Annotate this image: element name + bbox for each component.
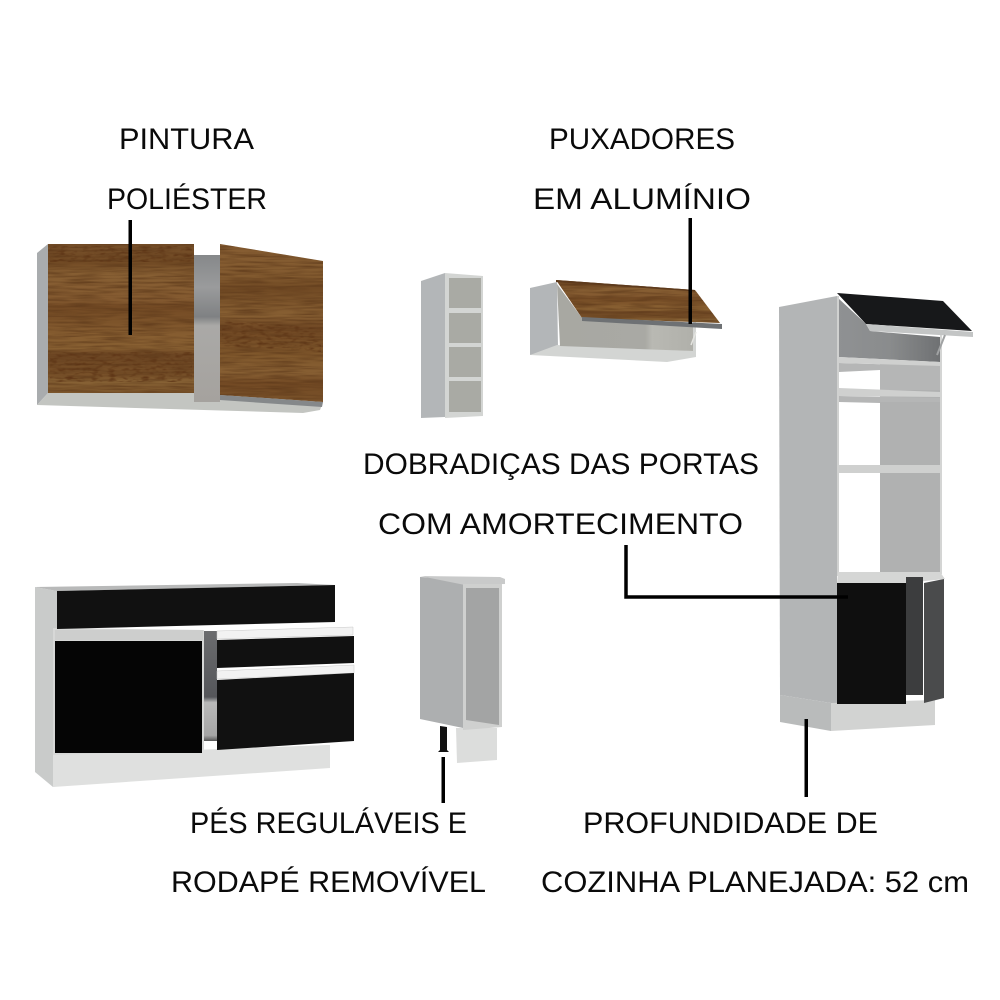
lift-up wood door <box>556 280 720 323</box>
lower drawer front <box>217 673 354 750</box>
narrow cabinet top <box>420 576 505 585</box>
tower upper interior <box>838 298 940 362</box>
upper drawer handle <box>217 627 353 639</box>
leader line: profundidade <box>804 719 808 797</box>
heading: dobradiças: DOBRADIÇAS DAS PORTAS <box>363 448 759 481</box>
heading: pintura poliéster <box>107 123 267 216</box>
heading: profundidade: PROFUNDIDADE DE <box>583 807 878 840</box>
tower open interior <box>906 577 923 695</box>
base cabinet plinth <box>53 745 330 787</box>
leader line: pintura <box>128 220 132 335</box>
cabinet bottom edge <box>37 393 323 413</box>
heading: dobradiças <box>363 448 759 541</box>
tower right black door <box>924 579 944 703</box>
right wood door <box>220 244 323 402</box>
panel: wall cabinet with lift-up wood door <box>530 280 722 362</box>
tower white openings <box>839 372 879 572</box>
tower side panel <box>779 296 837 703</box>
panel: narrow base cabinet <box>420 576 505 763</box>
upper drawer front <box>217 636 354 668</box>
right door edge <box>220 395 323 407</box>
heading: pés reguláveis: RODAPÉ REMOVÍVEL <box>171 866 486 899</box>
heading: profundidade <box>541 807 969 899</box>
cabinet interior <box>194 255 220 402</box>
base cabinet face <box>53 628 330 760</box>
door lower edge <box>582 317 722 329</box>
shelf openings <box>449 278 481 412</box>
panel: narrow open shelf unit <box>421 273 483 418</box>
top black panel <box>57 585 335 629</box>
tower shelf undersides <box>839 363 940 403</box>
narrow cabinet frame <box>463 584 502 730</box>
tower plinth side <box>780 695 831 731</box>
lower drawer handle <box>217 665 354 679</box>
heading: pés reguláveis: PÉS REGULÁVEIS E <box>190 807 467 840</box>
lift-up door edge <box>866 324 973 337</box>
tower countertop <box>837 572 945 584</box>
tower shelves <box>839 357 940 473</box>
heading: pés reguláveis <box>171 807 486 899</box>
door hinge <box>937 335 945 355</box>
panel: base cabinet with sink space and drawers <box>35 583 354 787</box>
heading: puxadores em alumínio: PUXADORES <box>549 123 735 156</box>
strip under top panel <box>55 630 203 640</box>
tower lift-up black door <box>837 293 972 331</box>
wall cabinet right edge <box>693 322 696 353</box>
wall cabinet interior <box>557 284 693 351</box>
black cabinet door <box>55 641 202 753</box>
leveling foot <box>438 726 449 752</box>
door top edge <box>556 280 695 292</box>
cabinet side <box>37 244 48 405</box>
heading: puxadores em alumínio: EM ALUMÍNIO <box>533 183 751 216</box>
heading: pintura poliéster: PINTURA <box>119 123 254 156</box>
tower plinth front <box>831 700 935 731</box>
tower right edge <box>940 332 942 574</box>
narrow cabinet plinth <box>456 728 497 763</box>
tower back panel <box>880 362 940 574</box>
tower left black door <box>837 583 906 704</box>
tower left edge <box>837 296 839 576</box>
drawer interior <box>204 631 217 741</box>
shelf unit side <box>421 273 445 418</box>
panel: upper cabinet with wood doors <box>37 244 323 413</box>
shelf unit frame <box>445 273 483 418</box>
left wood door <box>48 244 194 393</box>
leader line: puxadores <box>688 218 692 324</box>
heading: dobradiças: COM AMORTECIMENTO <box>378 508 743 541</box>
panel: tall oven tower <box>779 293 973 731</box>
wall cabinet side <box>530 282 558 355</box>
narrow cabinet interior <box>466 588 499 725</box>
leader line: pés <box>442 757 445 803</box>
wall cabinet bottom frame <box>530 345 696 362</box>
wall cabinet door hinge <box>691 332 696 345</box>
leader line: dobradiças <box>626 545 848 597</box>
heading: pintura poliéster: POLIÉSTER <box>107 183 267 216</box>
narrow cabinet side <box>420 577 465 728</box>
base cabinet top <box>35 583 335 591</box>
heading: profundidade: COZINHA PLANEJADA: 52 cm <box>541 866 969 899</box>
base cabinet side <box>35 587 57 787</box>
heading: puxadores em alumínio <box>533 123 751 216</box>
